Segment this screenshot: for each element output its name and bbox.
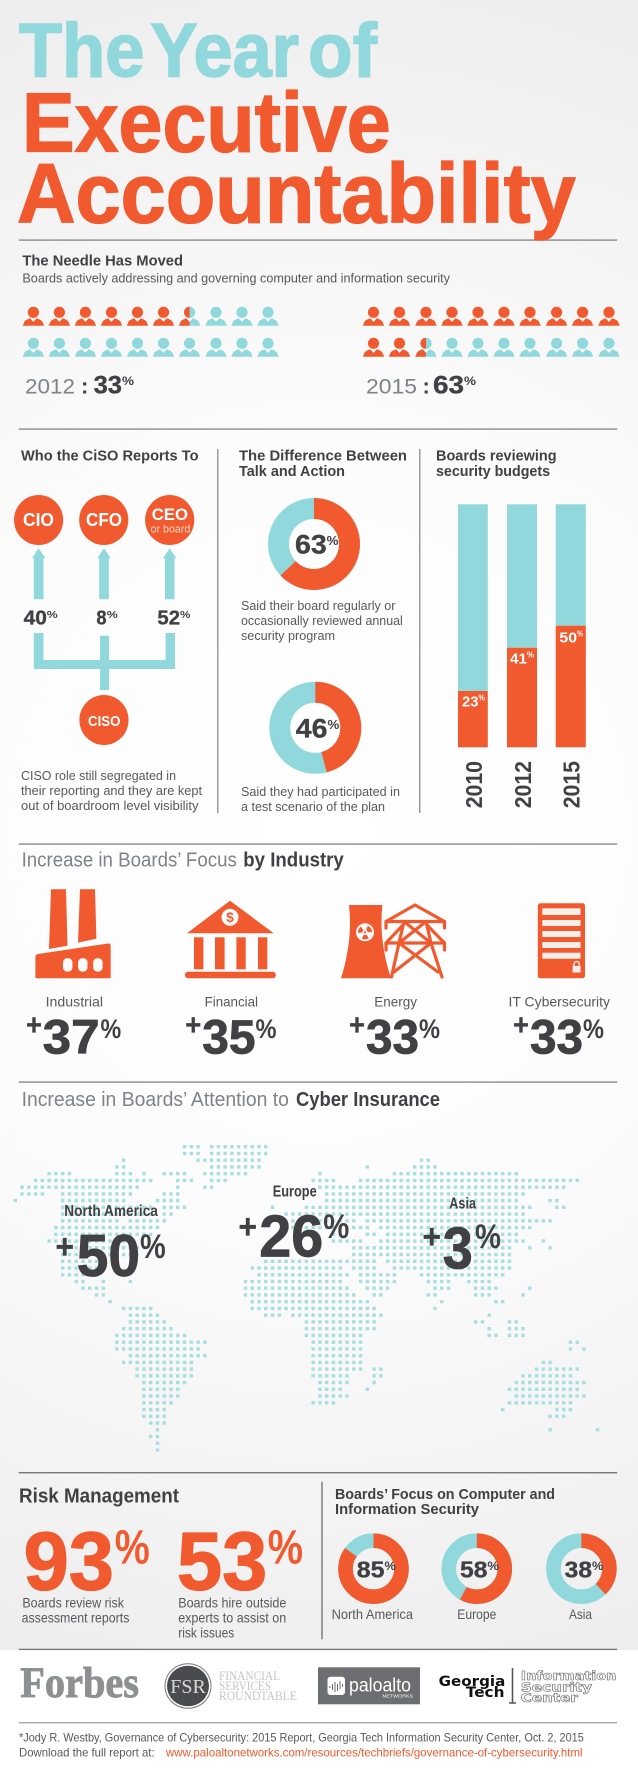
stat: Asia: %: [475, 1218, 501, 1256]
value 52%: %: [180, 610, 191, 621]
caption 53%: risk issues: [178, 1625, 234, 1641]
logo: Palo Alto Networks: paloalto: [349, 1676, 411, 1697]
stat: financial: 35: [202, 1011, 256, 1064]
value 8%: %: [107, 610, 118, 621]
circle: CISO: [79, 695, 129, 745]
logo: Financial Services Roundtable: SERVICES: [219, 1679, 271, 1693]
stat: energy: 33: [366, 1011, 419, 1064]
circle: CFO: [79, 495, 128, 545]
arrow: to CIO: [32, 548, 46, 599]
donut: Asia 38%: %: [592, 1559, 604, 1573]
title: Executive: [22, 76, 391, 170]
stat 93%: 93: [24, 1514, 114, 1607]
stat: industrial: [26, 994, 121, 1064]
bar 2012: [507, 504, 537, 808]
arrow: to CEO: [163, 548, 176, 599]
bar 2015: [556, 504, 586, 808]
icon: bank: [185, 901, 276, 978]
stat 2012: [25, 371, 134, 399]
stat: IT cybersecurity: 33: [530, 1011, 583, 1064]
title: Accountability: [17, 147, 576, 241]
heading: Talk and Action: [239, 464, 345, 480]
value 8%: 8: [96, 607, 107, 629]
bar 2010: 23: [462, 694, 478, 711]
stat: energy: +: [349, 1009, 365, 1042]
heading: Increase in Boards’ Focus: [22, 850, 237, 872]
donut: North America 85%: [332, 1541, 413, 1622]
stat: North America: %: [140, 1228, 166, 1266]
stat: Europe: +: [238, 1208, 257, 1246]
caption: their reporting and they are kept: [21, 783, 202, 798]
bar 2010: 2010: [461, 761, 487, 808]
stat 2012: 2012: [25, 375, 75, 398]
heading: Who the CiSO Reports To: [21, 449, 199, 465]
stat: financial: +: [185, 1009, 201, 1042]
caption: out of boardroom level visibility: [21, 798, 199, 813]
circle: CISO: CISO: [88, 714, 120, 730]
circle: CEO or board: CEO: [152, 505, 188, 524]
heading: Boards reviewing: [436, 449, 557, 465]
panel: focus by industry: [22, 850, 610, 1064]
logo: Georgia Tech Information Security Center: Georgia: [439, 1674, 505, 1690]
stat 93%: %: [115, 1521, 150, 1574]
logo: Financial Services Roundtable: ROUNDTABLE: [219, 1689, 297, 1703]
icon: bank: $: [226, 910, 234, 925]
icon: energy: [341, 905, 444, 978]
donut 46%: 46: [296, 714, 328, 744]
panel: the needle has moved: [22, 254, 620, 399]
heading: [436, 449, 557, 480]
caption 93%: [22, 1595, 129, 1626]
value 52%: 52: [157, 607, 180, 629]
panel: who the CiSO reports to: [14, 449, 202, 813]
logo: Georgia Tech Information Security Center: Tech: [466, 1685, 504, 1701]
stat 2012: :: [81, 373, 88, 398]
stat: Asia: +: [422, 1218, 441, 1256]
panel: risk management: [19, 1486, 303, 1641]
caption 2: a test scenario of the plan: [241, 799, 385, 814]
panel: boards reviewing security budgets: [436, 449, 586, 808]
icon: factory: [35, 889, 111, 978]
heading: The Needle Has Moved: [22, 254, 183, 270]
stat 2015: %: [464, 374, 476, 388]
heading: [239, 449, 407, 480]
title: of: [308, 9, 378, 94]
caption 1: Said their board regularly or: [241, 598, 396, 613]
heading: The Difference Between: [239, 449, 407, 465]
stat: Asia: [422, 1195, 501, 1281]
donut: North America 85%: 85: [357, 1556, 385, 1582]
heading: [22, 1089, 440, 1111]
donut: Asia 38%: 38: [565, 1556, 592, 1582]
stat 2015: [366, 371, 476, 399]
donut: Europe 58%: %: [487, 1559, 499, 1573]
stat: Europe: %: [323, 1208, 349, 1246]
donut: Europe 58%: Europe: [457, 1606, 496, 1622]
stat: Europe: 26: [259, 1204, 323, 1270]
donut 63%: [278, 508, 350, 580]
stat: North America: 50: [77, 1223, 140, 1289]
stat: IT cybersecurity: [508, 994, 610, 1064]
heading: security budgets: [436, 464, 550, 480]
donut: Asia 38%: [553, 1541, 609, 1622]
stat: IT cybersecurity: +: [513, 1009, 529, 1042]
bar 2012: 2012: [510, 761, 536, 808]
logos: [20, 1660, 616, 1708]
bar 2015: 50: [559, 630, 577, 647]
logo: Forbes: Forbes: [20, 1660, 139, 1707]
connector: [34, 633, 175, 690]
caption 1: [241, 598, 403, 643]
logo: Georgia Tech Information Security Center: [439, 1668, 616, 1705]
caption 2: [241, 784, 400, 814]
value 40%: %: [47, 610, 58, 621]
arrow: to CFO: [97, 548, 111, 599]
footnote: www.paloaltonetworks.com/resources/techbriefs/governance-of-cybersecurity.html: [165, 1747, 583, 1760]
heading: by Industry: [243, 850, 345, 872]
heading: Risk Management: [19, 1486, 179, 1508]
stat: energy: [349, 994, 440, 1064]
caption 1: security program: [241, 628, 335, 643]
donut 63%: 63: [295, 529, 327, 559]
heading: Increase in Boards’ Attention to: [22, 1089, 289, 1111]
logo: Georgia Tech Information Security Center: Security: [521, 1680, 592, 1695]
stat: North America: [56, 1203, 166, 1289]
people chart 2012: [23, 307, 279, 357]
stat 2015: 2015: [366, 375, 417, 398]
value 8%: [96, 607, 118, 629]
stat: IT cybersecurity: %: [583, 1014, 604, 1044]
footnote: *Jody R. Westby, Governance of Cybersecurity: 2015 Report, Georgia Tech Information Security Center, Oct. 2, 2015: [19, 1732, 584, 1745]
circle: CEO or board: or board: [150, 524, 190, 536]
value 40%: [24, 607, 58, 629]
value 52%: [157, 607, 191, 629]
donut: Asia 38%: Asia: [569, 1606, 592, 1622]
logo: Palo Alto Networks: NETWORKS: [382, 1694, 413, 1699]
donut 46%: %: [328, 717, 340, 732]
circle: CEO or board: [145, 495, 194, 545]
title: Year: [150, 9, 299, 94]
icon: server: [538, 903, 585, 978]
stat: industrial: Industrial: [46, 994, 103, 1010]
circle: CIO: CIO: [23, 510, 54, 530]
stat: IT cybersecurity: IT Cybersecurity: [508, 994, 610, 1010]
stat 53%: %: [268, 1521, 303, 1574]
bar 2015: 2015: [559, 761, 585, 808]
logo: Palo Alto Networks: [318, 1667, 420, 1704]
stat: financial: Financial: [205, 994, 258, 1010]
bar 2012: %: [527, 650, 534, 659]
caption 93%: assessment reports: [22, 1610, 129, 1626]
panel: cyber insurance: [14, 1089, 603, 1450]
heading: [335, 1486, 555, 1518]
stat: Europe: [238, 1184, 349, 1270]
heading: Boards’ Focus on Computer and: [335, 1486, 555, 1503]
stat: North America: North America: [64, 1203, 158, 1220]
caption 1: occasionally reviewed annual: [241, 613, 403, 628]
panel: talk and action: [239, 449, 407, 814]
heading: Cyber Insurance: [296, 1089, 440, 1111]
dotted world map: [14, 1147, 603, 1450]
bar 2010: [458, 504, 488, 808]
circle: CFO: CFO: [86, 510, 122, 530]
donut: Europe 58%: [449, 1541, 505, 1622]
stat: Asia: Asia: [449, 1195, 476, 1212]
people chart 2015: [363, 307, 620, 357]
stat: Asia: 3: [443, 1215, 473, 1281]
caption: [21, 768, 202, 813]
caption 93%: Boards review risk: [22, 1595, 125, 1611]
title: [17, 9, 576, 241]
logo: Financial Services Roundtable: [165, 1664, 297, 1708]
circle: CIO: [14, 495, 63, 545]
stat 2012: %: [122, 374, 134, 388]
stat: industrial: +: [26, 1009, 42, 1042]
logo: Financial Services Roundtable: FSR: [170, 1676, 206, 1698]
stat 2015: 63: [433, 371, 464, 399]
stat 2015: :: [422, 373, 430, 398]
stat: energy: %: [419, 1014, 440, 1044]
stat: Europe: Europe: [273, 1184, 317, 1201]
bar 2012: 41: [510, 650, 527, 667]
footnote: [19, 1732, 584, 1760]
stat: North America: +: [56, 1228, 74, 1266]
donut: North America 85%: %: [384, 1559, 396, 1573]
donut: North America 85%: North America: [332, 1606, 413, 1622]
donut 63%: %: [327, 533, 339, 548]
donut: Europe 58%: 58: [460, 1556, 488, 1582]
bar 2015: %: [577, 630, 583, 639]
caption: CISO role still segregated in: [21, 768, 176, 783]
logo: Georgia Tech Information Security Center: Center: [521, 1690, 579, 1705]
stat: financial: [185, 994, 276, 1064]
caption 53%: Boards hire outside: [178, 1595, 287, 1611]
value 40%: 40: [24, 607, 47, 629]
stat: energy: Energy: [374, 994, 417, 1010]
title: The: [19, 9, 144, 94]
bar 2010: %: [478, 694, 485, 703]
panel: boards' focus on computer and information security: [332, 1486, 609, 1622]
logo: Georgia Tech Information Security Center: Information: [521, 1668, 616, 1683]
stat 2012: 33: [94, 371, 122, 399]
caption 53%: [178, 1595, 287, 1641]
heading: Information Security: [335, 1501, 480, 1518]
stat: financial: %: [256, 1014, 276, 1044]
caption 2: Said they had participated in: [241, 784, 400, 799]
logo: Financial Services Roundtable: FINANCIAL: [219, 1669, 280, 1683]
stat: industrial: 37: [43, 1011, 100, 1064]
donut 46%: [280, 692, 351, 763]
subheading: Boards actively addressing and governing computer and information security: [22, 271, 450, 286]
footnote: Download the full report at:: [19, 1747, 155, 1760]
stat 53%: 53: [177, 1514, 267, 1607]
caption 53%: experts to assist on: [178, 1610, 286, 1626]
stat: industrial: %: [100, 1014, 121, 1044]
